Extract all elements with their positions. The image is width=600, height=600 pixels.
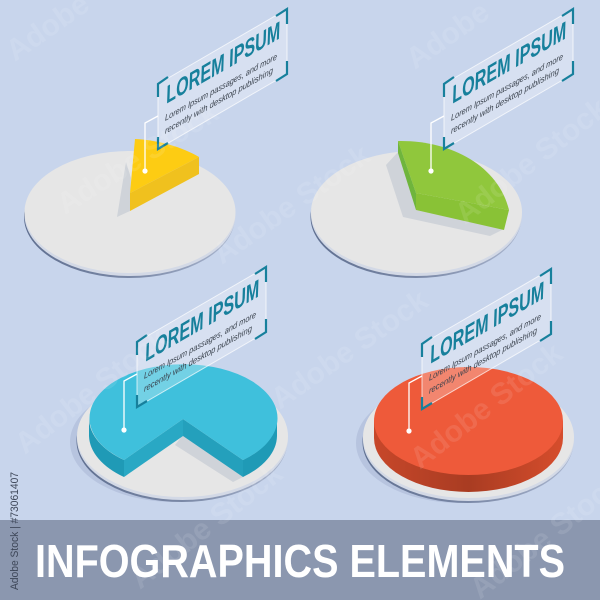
watermarks: Adobe Stock (124, 456, 289, 596)
pie chart 3: blue pie with missing slice (70, 364, 288, 502)
callout 2: Lorem Ipsum passages, and more (451, 51, 563, 124)
callout 1: Lorem Ipsum passages, and more (165, 51, 277, 124)
callout 4: Lorem Ipsum passages, and more (429, 311, 541, 384)
watermarks: Adobe Stock (9, 321, 174, 461)
callout 2 (428, 9, 573, 174)
watermarks: Adobe Stock (207, 138, 376, 271)
callout 4 (406, 269, 551, 434)
callout 1: recently with desktop publishing (165, 65, 274, 137)
callout 3: Lorem Ipsum passages, and more (144, 309, 256, 382)
footer band (0, 520, 600, 600)
watermarks: Adobe Stock (404, 336, 569, 476)
watermarks: Adobe Stock (265, 283, 434, 416)
callout 3: recently with desktop publishing (144, 323, 253, 395)
pie chart 2: green slice (310, 141, 522, 278)
pie chart 4: full red pie (356, 367, 574, 503)
pie chart 1: yellow slice (24, 139, 236, 278)
callout 3: LOREM IPSUM (145, 273, 260, 368)
callout 3 (121, 267, 266, 433)
stock id side label: Adobe Stock | #73061407 (9, 472, 21, 590)
callout 4: recently with desktop publishing (429, 325, 538, 397)
watermarks: Adobe Stock (51, 96, 224, 221)
callout 2: recently with desktop publishing (451, 65, 560, 137)
callout 1 (142, 9, 287, 174)
